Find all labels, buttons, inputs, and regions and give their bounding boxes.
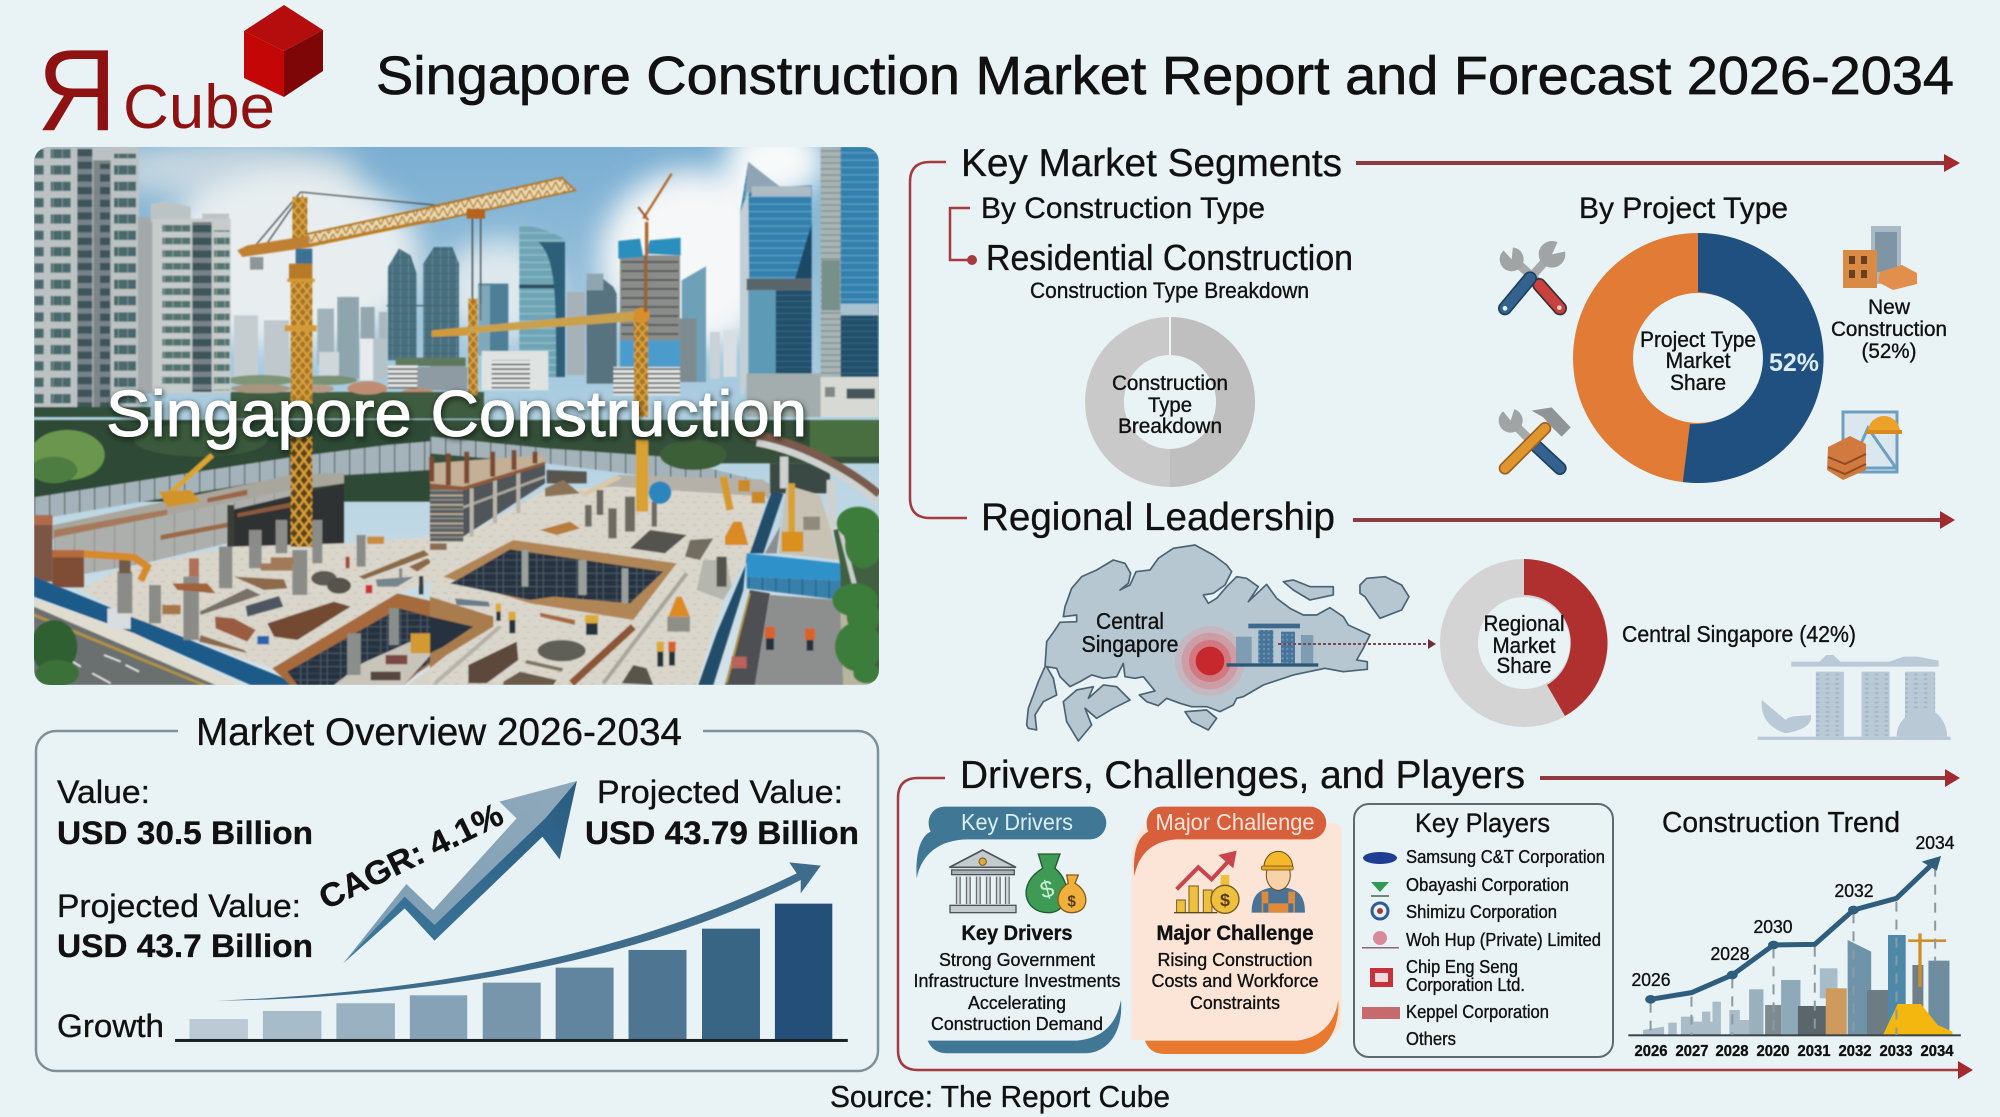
line chart: construction trend: 2020 — [1756, 1043, 1790, 1060]
icon: red cube — [244, 5, 323, 97]
player names: Samsung C&T Corporation — [1406, 847, 1605, 867]
key drivers text: Key Drivers — [962, 922, 1072, 945]
heading: Regional Leadership — [981, 496, 1335, 539]
panel: market overview — [36, 711, 878, 1071]
card: key drivers — [916, 807, 1121, 1053]
donut: project type: 52% — [1769, 349, 1819, 377]
line chart: construction trend: 2028 — [1710, 944, 1750, 964]
icon: bank — [949, 850, 1016, 913]
line chart: construction trend: 2033 — [1880, 1043, 1913, 1060]
arrow: bottom — [1958, 1061, 1973, 1079]
by construction type heading: By Construction Type — [981, 192, 1265, 225]
site: lower right — [430, 420, 882, 685]
arrow: CAGR zigzag — [343, 781, 577, 963]
icon: money bags — [1026, 854, 1086, 913]
player names: Chip Eng Seng — [1406, 957, 1518, 977]
line chart: construction trend: 2032 — [1838, 1043, 1872, 1060]
projected value right: USD 43.79 Billion — [585, 815, 859, 851]
major challenge pill label: Major Challenge — [1156, 809, 1314, 835]
breakdown caption: Construction Type Breakdown — [1030, 278, 1309, 303]
value now — [57, 774, 313, 851]
section frame — [898, 778, 1960, 1070]
by project type heading: By Project Type — [1579, 192, 1788, 225]
line chart: construction trend: 2034 — [1916, 833, 1954, 853]
arrow — [1356, 154, 1960, 172]
key drivers text: Construction Demand — [931, 1013, 1103, 1034]
major challenge text: Constraints — [1190, 992, 1280, 1013]
donut: project type: Share — [1670, 370, 1726, 395]
projected value left: Projected Value: — [57, 888, 301, 924]
major challenge text: Major Challenge — [1156, 922, 1314, 945]
new construction label: Construction — [1831, 318, 1947, 341]
donut: project type — [1573, 233, 1824, 483]
card: major challenge — [1132, 807, 1342, 1054]
panel: hero construction photo illustration — [30, 120, 882, 687]
share label: Central Singapore (42%) — [1622, 621, 1856, 647]
top right skyline — [430, 147, 879, 417]
major challenge text: Rising Construction — [1158, 949, 1312, 970]
icon: new building with bricks — [1843, 226, 1917, 290]
panel: regional leadership — [981, 496, 1955, 741]
major challenge text — [1152, 922, 1318, 1013]
map label: Central — [1096, 608, 1164, 634]
growth label: Growth — [57, 1008, 164, 1044]
crane: main — [237, 190, 484, 404]
site: lower left — [30, 420, 484, 687]
title: Singapore Construction Market Report and Forecast 2026-2034 — [376, 46, 1954, 106]
panel: drivers, challenges and players — [898, 754, 1973, 1079]
player names: Obayashi Corporation — [1406, 875, 1569, 895]
map label — [1082, 608, 1178, 657]
connector — [950, 208, 977, 265]
residential heading: Residential Construction — [986, 237, 1353, 278]
donut: regional share — [1440, 559, 1608, 727]
donut: construction type: Breakdown — [1118, 415, 1222, 438]
icon: marina bay skyline — [1758, 655, 1951, 740]
photo caption: Singapore Construction — [106, 377, 807, 450]
icon: hammer and wrench — [1499, 404, 1571, 468]
donut: project type: Project Type — [1640, 327, 1756, 352]
projected value right: Projected Value: — [597, 774, 843, 810]
player names: Woh Hup (Private) Limited — [1406, 930, 1601, 950]
key drivers text: Strong Government — [939, 949, 1095, 970]
map: Singapore — [1027, 545, 1409, 741]
arrow — [1353, 511, 1955, 529]
bar chart: growth — [175, 862, 848, 1042]
logo word: Cube — [123, 73, 275, 142]
player names: Keppel Corporation — [1406, 1002, 1549, 1022]
icon: money bags: $ — [1037, 875, 1057, 905]
projected value left — [57, 888, 313, 964]
line chart: construction trend: 2027 — [1676, 1043, 1708, 1060]
icon: rising cost chart: $ — [1220, 890, 1230, 910]
key drivers text: Accelerating — [968, 992, 1066, 1013]
panel heading: Market Overview 2026-2034 — [196, 711, 682, 754]
panel: key market segments — [910, 142, 1960, 518]
line chart: construction trend: 2026 — [1634, 1043, 1668, 1060]
workers — [496, 603, 815, 667]
player names — [1406, 847, 1605, 1049]
icon: money bags: $ — [1067, 894, 1076, 911]
source: Source: The Report Cube — [830, 1079, 1170, 1114]
line chart: construction trend: 2031 — [1798, 1043, 1831, 1060]
arrow: top — [1540, 769, 1960, 787]
projected value right — [585, 774, 859, 851]
line chart: construction trend: 2032 — [1834, 881, 1874, 901]
new construction label: (52%) — [1862, 340, 1916, 363]
line chart: construction trend: 2026 — [1632, 970, 1670, 990]
map label: Singapore — [1082, 631, 1178, 657]
panel: key players — [1354, 804, 1613, 1057]
player names: Shimizu Corporation — [1406, 902, 1557, 922]
heading: Drivers, Challenges, and Players — [960, 754, 1525, 797]
player logos — [1362, 852, 1400, 1019]
key drivers text: Infrastructure Investments — [914, 970, 1120, 991]
icon: blueprint helmet bricks — [1827, 412, 1902, 480]
heading: Key Market Segments — [961, 142, 1342, 185]
donut: regional share: Market — [1492, 633, 1556, 658]
line chart: construction trend: 2034 — [1920, 1043, 1954, 1060]
logo letter: Я — [37, 25, 117, 155]
line chart: construction trend: 2030 — [1754, 917, 1792, 937]
line chart: construction trend — [1628, 833, 1961, 1060]
projected value left: USD 43.7 Billion — [57, 928, 313, 964]
new construction label — [1831, 296, 1947, 363]
section bracket — [910, 162, 967, 518]
value now: USD 30.5 Billion — [57, 815, 313, 851]
icon: crossed wrenches — [1500, 237, 1572, 311]
logo: R Cube — [37, 5, 323, 155]
panel border — [36, 731, 878, 1071]
donut: construction type — [1085, 317, 1255, 487]
value now: Value: — [57, 774, 150, 810]
donut: regional share: Regional — [1484, 611, 1564, 636]
arrow: dotted connector — [1278, 639, 1436, 649]
line chart: construction trend: 2028 — [1716, 1043, 1749, 1060]
key drivers text — [914, 922, 1120, 1034]
heading: construction trend: Construction Trend — [1662, 807, 1900, 839]
player names: Others — [1406, 1029, 1456, 1049]
donut: regional share: Share — [1496, 653, 1552, 678]
key players heading: Key Players — [1415, 808, 1550, 838]
icon: rising cost chart — [1174, 851, 1239, 913]
CAGR label: CAGR: 4.1% — [313, 795, 509, 916]
player names: Corporation Ltd. — [1406, 975, 1525, 995]
top left towers — [34, 147, 484, 419]
donut: construction type: Type — [1148, 394, 1192, 417]
donut: project type: Market — [1666, 348, 1730, 373]
new construction label: New — [1868, 296, 1911, 319]
major challenge text: Costs and Workforce — [1152, 970, 1318, 991]
icon: worker with helmet — [1252, 851, 1305, 913]
key drivers pill label: Key Drivers — [961, 809, 1073, 835]
donut: construction type: Construction — [1112, 372, 1228, 395]
